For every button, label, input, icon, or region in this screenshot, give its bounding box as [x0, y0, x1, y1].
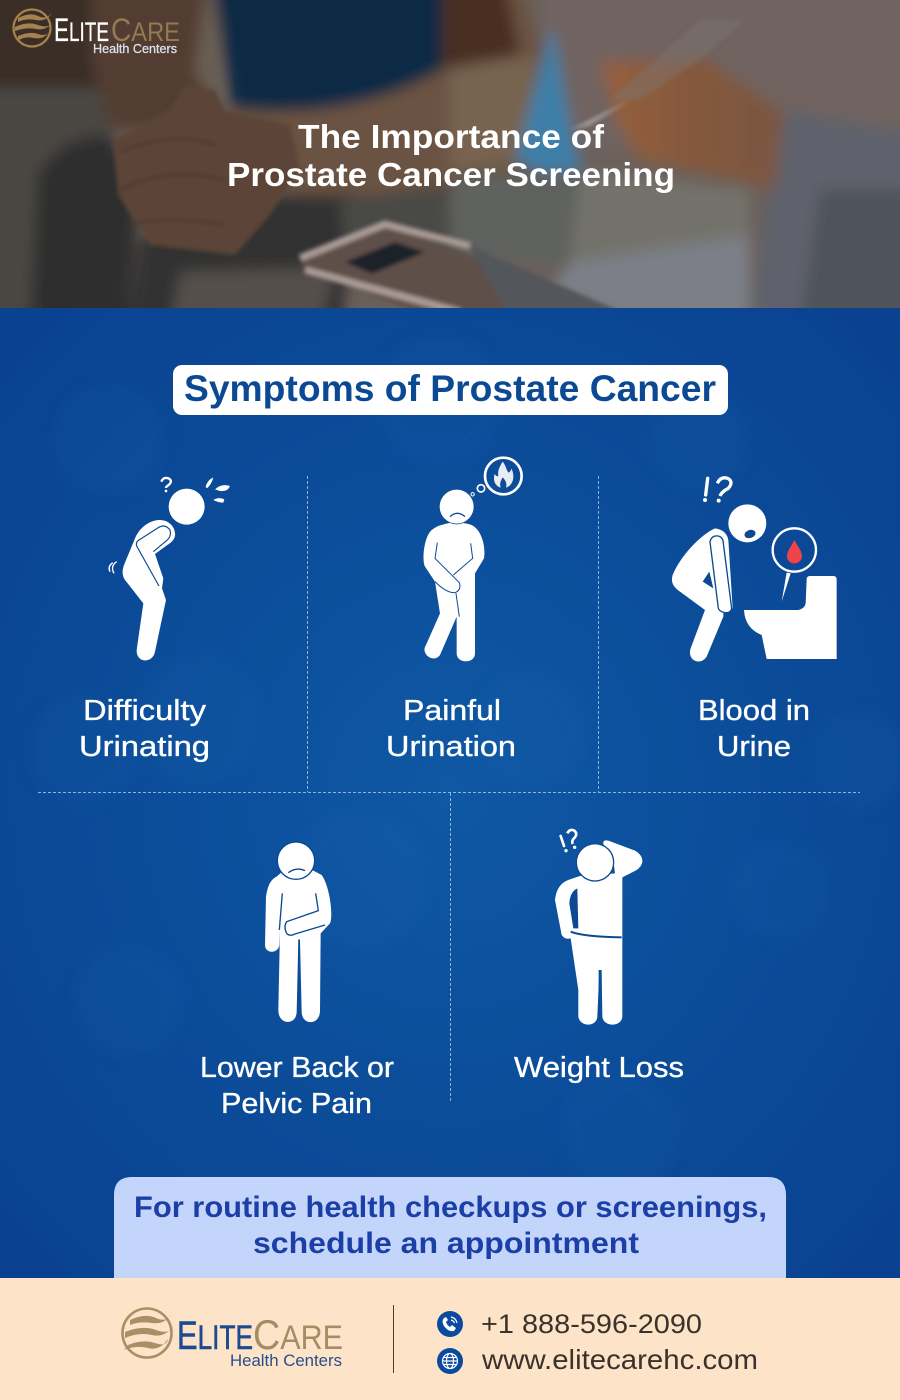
symptom labels: Weight Loss	[514, 1052, 684, 1084]
call to action box: schedule an appointment	[253, 1227, 639, 1260]
header logo: ELITE	[54, 12, 109, 48]
icon: difficulty urinating figure	[109, 477, 230, 660]
footer divider	[393, 1305, 394, 1373]
icon: globe	[437, 1348, 463, 1374]
header logo: CARE	[111, 12, 180, 48]
section heading pill: Symptoms of Prostate Cancer	[184, 368, 716, 409]
blue symptoms panel	[0, 308, 900, 1278]
symptom labels: Difficulty	[83, 695, 207, 727]
call to action box	[114, 1177, 786, 1278]
icon: painful urination figure	[424, 458, 522, 661]
main title: The Importance of	[298, 118, 605, 155]
header logo: Health Centers	[93, 41, 177, 56]
symptom labels: Lower Back or	[200, 1052, 394, 1084]
header logo	[14, 10, 180, 56]
website address: www.elitecarehc.com	[481, 1344, 758, 1375]
icon: weight loss figure	[555, 830, 642, 1025]
phone number: +1 888-596-2090	[481, 1309, 702, 1339]
symptom labels: Painful	[403, 695, 501, 727]
icon: lower back or pelvic pain figure	[265, 842, 331, 1022]
symptom labels: Pelvic Pain	[221, 1088, 372, 1120]
footer logo: ELITE	[177, 1314, 253, 1358]
symptom labels: Urination	[386, 731, 516, 763]
symptom labels	[79, 695, 810, 1120]
symptom labels: Urine	[717, 731, 791, 763]
footer logo: Health Centers	[230, 1351, 342, 1370]
symptom labels: Blood in	[698, 695, 810, 727]
footer logo	[122, 1308, 343, 1370]
icon: phone	[437, 1311, 463, 1337]
icon: blood in urine figure	[672, 478, 837, 662]
main title	[227, 118, 675, 193]
main title: Prostate Cancer Screening	[227, 156, 675, 193]
header photo: patient and doctor	[0, 0, 900, 330]
footer logo: CARE	[253, 1311, 343, 1358]
symptom labels: Urinating	[79, 731, 210, 763]
call to action box: For routine health checkups or screenings,	[134, 1191, 767, 1224]
footer band	[0, 1278, 900, 1400]
